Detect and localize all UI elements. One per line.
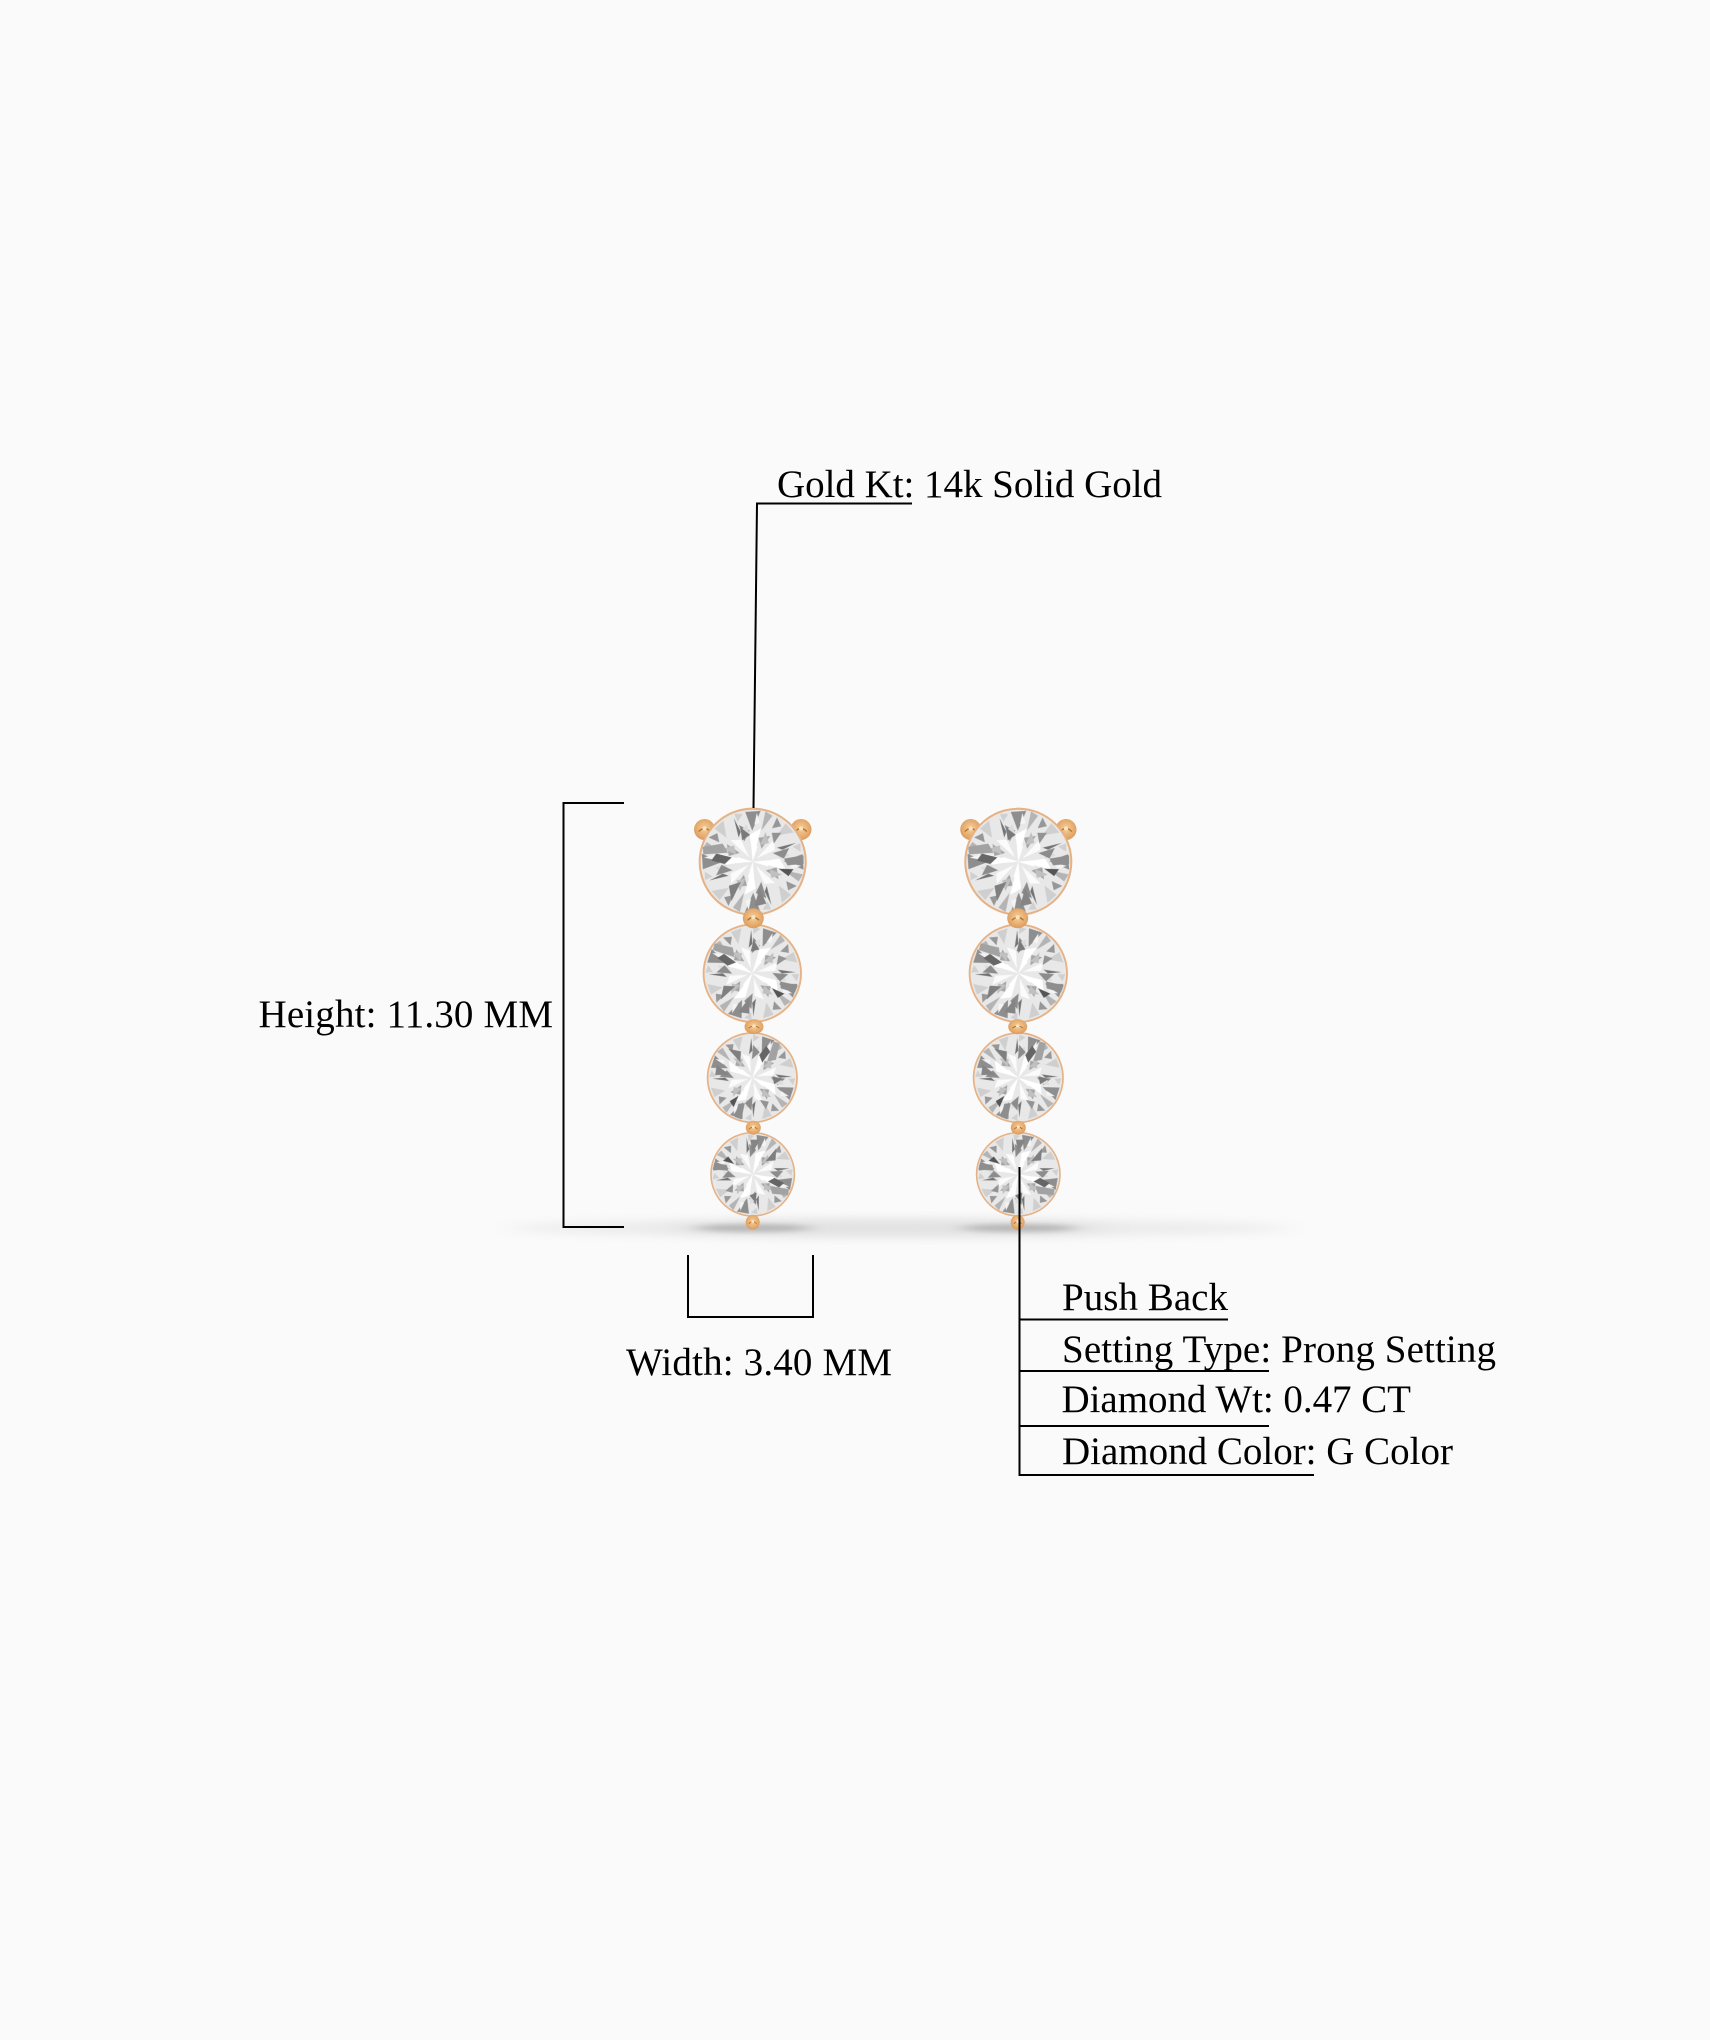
leader line: gold karat bbox=[754, 504, 912, 808]
prong: right top bbox=[1056, 819, 1076, 840]
bracket: height bbox=[564, 803, 624, 1227]
label: diamond color: Diamond Color: G Color bbox=[1062, 1430, 1453, 1473]
callout: width bbox=[626, 1255, 892, 1384]
prong: right top bbox=[790, 819, 812, 840]
label: width: Width: 3.40 MM bbox=[626, 1341, 892, 1384]
prong: left top bbox=[694, 819, 715, 840]
label: setting type: Setting Type: Prong Setting bbox=[1062, 1328, 1496, 1371]
connector beads bbox=[743, 908, 764, 1230]
callout: specifications list bbox=[1018, 1167, 1496, 1475]
prong: left top bbox=[960, 819, 981, 840]
callout: height bbox=[258, 803, 624, 1227]
leader lines: specifications bbox=[1018, 1167, 1314, 1475]
ground shadow bbox=[510, 1219, 1290, 1237]
label: height: Height: 11.30 MM bbox=[258, 993, 553, 1036]
diamond 4 bbox=[965, 1121, 1072, 1228]
bracket: width bbox=[688, 1255, 813, 1317]
diamond 1 bbox=[694, 803, 811, 920]
diamond 1 bbox=[960, 803, 1077, 920]
connector beads bbox=[1007, 908, 1028, 1230]
label: gold karat: Gold Kt: 14k Solid Gold bbox=[777, 463, 1162, 506]
diamond 3 bbox=[692, 1017, 813, 1138]
diamond 2 bbox=[952, 907, 1084, 1039]
diamond 3 bbox=[958, 1017, 1079, 1138]
diamond 2 bbox=[686, 907, 818, 1039]
right earring bbox=[952, 803, 1084, 1230]
callout: gold karat bbox=[754, 463, 1162, 808]
label: diamond weight: Diamond Wt: 0.47 CT bbox=[1062, 1378, 1411, 1421]
diamond 4 bbox=[699, 1121, 806, 1228]
left earring bbox=[686, 803, 818, 1230]
label: back type: Push Back bbox=[1062, 1276, 1228, 1319]
